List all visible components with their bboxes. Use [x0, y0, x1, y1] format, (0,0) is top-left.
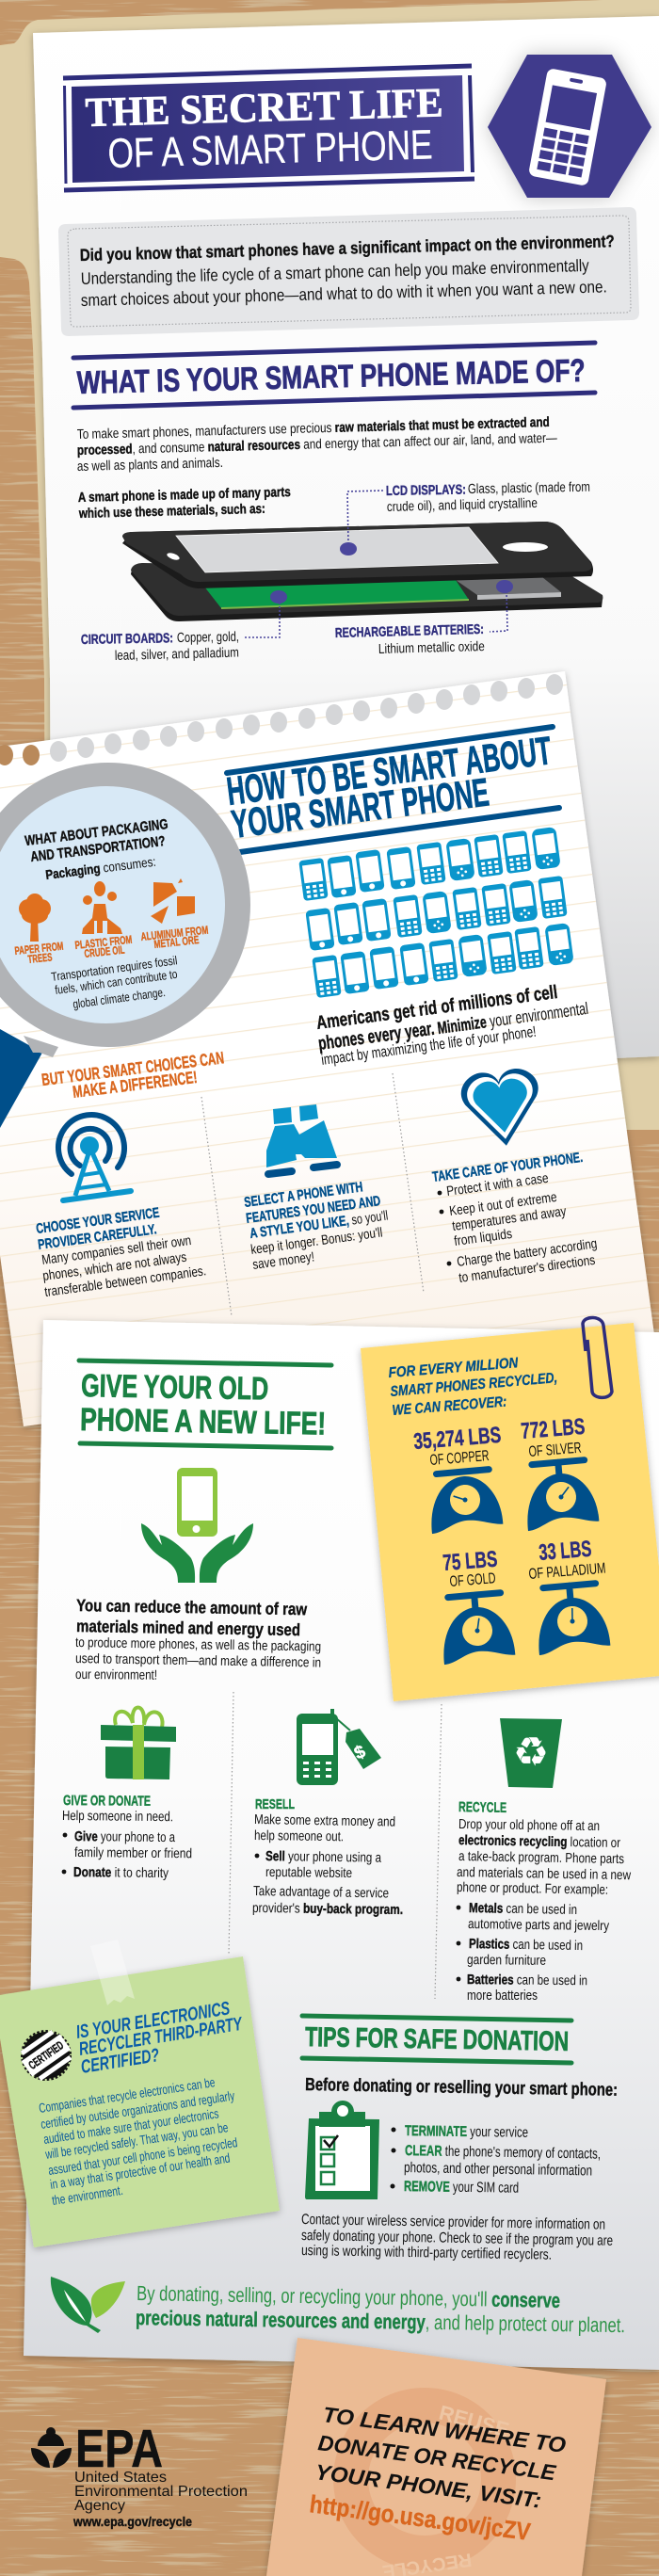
- column: recycle: Plastics can be used in: [469, 1937, 583, 1954]
- americans text: Americans get rid of millions of cell: [315, 982, 558, 1034]
- heading: give your old phone: [79, 1360, 331, 1448]
- heading: how to be smart: YOUR SMART PHONE: [229, 769, 491, 846]
- column: recycle: RECYCLE: [458, 1799, 506, 1816]
- heading: give your old phone: PHONE A NEW LIFE!: [80, 1402, 326, 1442]
- new life text: You can reduce the amount of raw: [76, 1596, 308, 1618]
- panel: yellow note: [361, 1323, 659, 1701]
- packaging material labels: PAPER FROM: [14, 940, 64, 958]
- label: circuit boards: Copper, gold,: [177, 630, 239, 646]
- choice: take care: Keep it out of extreme: [448, 1190, 558, 1219]
- panel: white paper lower section: [24, 1320, 659, 2370]
- stat: silver: [520, 1414, 600, 1531]
- phone grid: [298, 827, 574, 998]
- icon: oil and car: [82, 881, 122, 934]
- column: resell: help someone out.: [254, 1828, 344, 1844]
- tips list: [390, 2123, 601, 2197]
- packaging material labels: METAL ORE: [153, 933, 200, 951]
- column: recycle: Batteries can be used in: [467, 1972, 587, 1988]
- certified body: will be recycled safely. That way, you can be: [43, 2119, 229, 2162]
- smart choices heading: [40, 1048, 225, 1102]
- transportation text: [50, 953, 178, 1011]
- icon: metal ore: [151, 878, 195, 924]
- title stamp: [63, 66, 474, 190]
- choice: take care: [431, 1150, 598, 1286]
- stat: copper: OF COPPER: [429, 1448, 490, 1469]
- column: recycle: electronics recycling location or: [458, 1833, 620, 1851]
- label: LCD displays: LCD DISPLAYS:: [386, 483, 466, 499]
- magnifier heading: AND TRANSPORTATION?: [29, 833, 166, 865]
- panel: lined notebook paper: [0, 671, 655, 1426]
- magnifier heading: [24, 816, 169, 865]
- new life text: [75, 1596, 321, 1683]
- stat: palladium: 33 LBS: [538, 1537, 592, 1566]
- packaging material labels: CRUDE OIL: [84, 943, 125, 960]
- packaging material labels: PLASTIC FROM: [74, 933, 133, 952]
- paperclip: [583, 1317, 612, 1397]
- tips list: REMOVE your SIM card: [404, 2179, 519, 2197]
- icon: phone hexagon: [488, 55, 651, 198]
- handwritten heading: FOR EVERY MILLION: [388, 1355, 520, 1381]
- column: resell: Take advantage of a service: [253, 1884, 389, 1902]
- icon: clipboard checklist: [305, 2101, 379, 2199]
- EPA flower mark: [31, 2427, 72, 2468]
- label: circuit boards: lead, silver, and palladium: [115, 646, 239, 664]
- handwritten heading: SMART PHONES RECYCLED,: [390, 1370, 558, 1400]
- heading: tips for safe donation: TIPS FOR SAFE DONATION: [305, 2022, 569, 2057]
- choice: service provider: PROVIDER CAREFULLY.: [37, 1221, 157, 1253]
- icon: binoculars: [266, 1104, 337, 1174]
- smart choices heading: MAKE A DIFFERENCE!: [72, 1068, 198, 1102]
- packaging material labels: TREES: [27, 950, 53, 966]
- title line 1: THE SECRET LIFE: [85, 79, 443, 136]
- conserve message: By donating, selling, or recycling your phone, you'll conserve: [137, 2281, 560, 2312]
- recycle watermark: REUSE: [437, 2401, 511, 2441]
- contact text: using is working with third-party certified recyclers.: [301, 2243, 552, 2263]
- new life text: to produce more phones, as well as the packaging: [75, 1635, 321, 1655]
- label: rechargeable batteries: RECHARGEABLE BATTERIES:: [335, 622, 484, 641]
- packaging consumes label: Packaging consumes:: [44, 854, 156, 882]
- magnifying glass: handle: [0, 1029, 58, 1128]
- EPA logo: EPA: [75, 2419, 163, 2479]
- call to action: [313, 2402, 568, 2513]
- americans text: phones every year. Minimize your environmental: [317, 998, 589, 1055]
- notebook holes: [0, 674, 563, 765]
- certified heading: [74, 1998, 245, 2078]
- column: recycle: automotive parts and jewelry: [468, 1917, 610, 1934]
- certified body: Companies that recycle electronics can be: [38, 2074, 217, 2116]
- choice: service provider: transferable between companies.: [43, 1264, 207, 1300]
- icon: heart: [458, 1066, 545, 1151]
- intro box: [58, 207, 639, 336]
- call to action: TO LEARN WHERE TO: [321, 2402, 568, 2457]
- column: recycle: a take-back program. Phone parts: [458, 1849, 624, 1867]
- icon: phone with price tag: $: [351, 1742, 369, 1764]
- certified badge: CERTIFIED: [26, 2038, 66, 2072]
- materials body text: processed, and consume natural resources and energy that can affect our air, land, and water—: [77, 431, 557, 459]
- heading: how to be smart: [224, 727, 559, 852]
- label: LCD displays: crude oil), and liquid crystalline: [387, 496, 538, 515]
- heading: tips for safe donation: [302, 2016, 571, 2063]
- choice: select a phone: A STYLE YOU LIKE, so you'll: [249, 1208, 389, 1242]
- column: give or donate: Give your phone to a: [74, 1829, 176, 1845]
- certified body: certified by outside organizations and regularly: [40, 2087, 235, 2132]
- choice: take care: TAKE CARE OF YOUR PHONE.: [431, 1150, 584, 1185]
- choice: take care: Charge the battery according: [456, 1236, 598, 1270]
- certified body: audited to make sure that your electronics: [42, 2105, 219, 2147]
- call to action: DONATE OR RECYCLE: [316, 2430, 557, 2485]
- certified body: [38, 2074, 238, 2208]
- label: rechargeable batteries: [335, 622, 485, 657]
- URL: http://go.usa.gov/jcZV: [308, 2489, 533, 2546]
- label: circuit boards: [81, 630, 239, 664]
- column: give or donate: Donate it to charity: [73, 1865, 169, 1881]
- certified heading: CERTIFIED?: [79, 2045, 161, 2078]
- EPA logo: [31, 2419, 248, 2529]
- stat: silver: 772 LBS: [520, 1414, 586, 1444]
- choice: service provider: Many companies sell their own: [40, 1233, 192, 1268]
- packaging material labels: ALUMINUM FROM: [140, 924, 209, 943]
- choice: take care: to manufacturer's directions: [458, 1253, 596, 1286]
- label: rechargeable batteries: Lithium metallic oxide: [378, 639, 485, 657]
- choice: service provider: phones, which are not always: [41, 1250, 187, 1284]
- panel: green note certified recycler: [0, 1940, 280, 2247]
- americans text: [315, 982, 589, 1069]
- tips list: CLEAR the phone's memory of contacts,: [405, 2143, 601, 2163]
- transportation text: global climate change.: [72, 985, 167, 1011]
- conserve message: [136, 2281, 625, 2337]
- certified body: the environment.: [51, 2182, 124, 2208]
- column: recycle: more batteries: [467, 1988, 538, 2004]
- label: LCD displays: Glass, plastic (made from: [468, 480, 590, 497]
- magnifier heading: WHAT ABOUT PACKAGING: [24, 816, 169, 849]
- icon: leaves: [51, 2277, 125, 2333]
- icon: hands holding phone: [141, 1468, 253, 1583]
- column: recycle: [457, 1799, 632, 2004]
- contact text: [301, 2212, 613, 2263]
- stat: palladium: OF PALLADIUM: [528, 1561, 606, 1583]
- column: recycle: phone or product. For example:: [457, 1880, 608, 1898]
- EPA logo: www.epa.gov/recycle: [72, 2514, 192, 2529]
- certified body: in a way that is protective of our health and: [49, 2150, 231, 2192]
- column: give or donate: GIVE OR DONATE: [63, 1793, 151, 1810]
- stat: palladium: [528, 1537, 611, 1655]
- label: LCD displays: [386, 480, 590, 515]
- recycle watermark: [333, 2388, 516, 2576]
- EPA logo: Agency: [74, 2498, 125, 2514]
- packaging material labels: [14, 924, 209, 966]
- handwritten heading: [388, 1355, 558, 1419]
- materials body text: [77, 415, 557, 522]
- column: resell: Make some extra money and: [254, 1812, 395, 1830]
- new life text: our environment!: [75, 1667, 157, 1683]
- column: recycle: Metals can be used in: [469, 1901, 577, 1918]
- certified heading: IS YOUR ELECTRONICS: [74, 1998, 232, 2043]
- column: recycle: garden furniture: [467, 1953, 546, 1969]
- materials body text: To make smart phones, manufacturers use precious raw materials that must be extracted and: [77, 415, 550, 443]
- label: circuit boards: CIRCUIT BOARDS:: [81, 631, 173, 648]
- choice: service provider: CHOOSE YOUR SERVICE: [35, 1205, 160, 1237]
- choice: select a phone: SELECT A PHONE WITH: [243, 1179, 363, 1211]
- choice: take care: Protect it with a case: [445, 1171, 550, 1199]
- choice: service provider: [35, 1205, 207, 1300]
- new life text: used to transport them—and make a difference in: [75, 1651, 321, 1671]
- title line 2: OF A SMART PHONE: [107, 121, 433, 177]
- column: give or donate: Help someone in need.: [62, 1809, 173, 1825]
- column: recycle: Drop your old phone off at an: [458, 1817, 600, 1834]
- choice: select a phone: keep it longer. Bonus: you'll: [249, 1225, 383, 1258]
- column: resell: RESELL: [255, 1796, 295, 1812]
- column: resell: reputable website: [265, 1865, 352, 1881]
- icon: tree: [19, 894, 51, 942]
- materials body text: A smart phone is made up of many parts: [78, 485, 291, 506]
- certified heading: RECYCLER THIRD-PARTY: [77, 2014, 245, 2060]
- materials body text: which use these materials, such as:: [78, 502, 265, 522]
- americans text: impact by maximizing the life of your phone!: [320, 1024, 538, 1069]
- new life text: materials mined and energy used: [76, 1617, 300, 1639]
- stat: gold: [439, 1547, 516, 1665]
- heading: give your old phone: GIVE YOUR OLD: [81, 1368, 268, 1407]
- panel: magnifying glass: [0, 763, 250, 1047]
- smart choices heading: BUT YOUR SMART CHOICES CAN: [40, 1048, 225, 1089]
- choice: select a phone: save money!: [251, 1249, 315, 1273]
- choice: select a phone: FEATURES YOU NEED AND: [245, 1193, 381, 1227]
- tips list: TERMINATE your service: [405, 2123, 528, 2141]
- choice: take care: from liquids: [453, 1227, 513, 1249]
- icon: cell tower: [58, 1115, 131, 1200]
- column: resell: provider's buy-back program.: [252, 1901, 403, 1918]
- stat: gold: 75 LBS: [442, 1547, 498, 1576]
- icon: phone with price tag: [297, 1709, 381, 1785]
- handwritten heading: WE CAN RECOVER:: [392, 1393, 507, 1419]
- choice: take care: temperatures and away: [451, 1204, 568, 1234]
- white paper: top section: [33, 16, 659, 1083]
- transportation text: Transportation requires fossil: [50, 953, 178, 984]
- choice: select a phone: [243, 1179, 389, 1273]
- call to action: YOUR PHONE, VISIT:: [313, 2459, 543, 2513]
- stat: silver: OF SILVER: [528, 1441, 582, 1460]
- icon: gift: [101, 1708, 176, 1779]
- stat: gold: OF GOLD: [449, 1570, 496, 1590]
- EPA logo: United States: [74, 2470, 167, 2486]
- certified badge: [17, 2027, 75, 2084]
- stat: copper: [412, 1423, 504, 1534]
- panel: peach note: [266, 2338, 606, 2576]
- column: resell: [252, 1796, 403, 1918]
- transportation text: fuels, which can contribute to: [54, 967, 178, 997]
- icon: recycling bin: ♻: [513, 1729, 549, 1775]
- column: give or donate: family member or friend: [74, 1845, 192, 1861]
- exploded phone diagram: [122, 491, 603, 637]
- manila folder: [0, 0, 659, 1130]
- tape: [90, 1940, 135, 2005]
- EPA logo: Environmental Protection: [74, 2484, 248, 2500]
- icon: recycling bin: [500, 1718, 562, 1788]
- column: give or donate: [62, 1793, 192, 1881]
- stat: copper: 35,274 LBS: [412, 1423, 502, 1455]
- tips list: photos, and other personal information: [404, 2160, 592, 2179]
- certified body: assured that your cell phone is being recycled: [47, 2134, 238, 2178]
- materials body text: as well as plants and animals.: [77, 456, 223, 475]
- column: resell: Sell your phone using a: [265, 1849, 382, 1866]
